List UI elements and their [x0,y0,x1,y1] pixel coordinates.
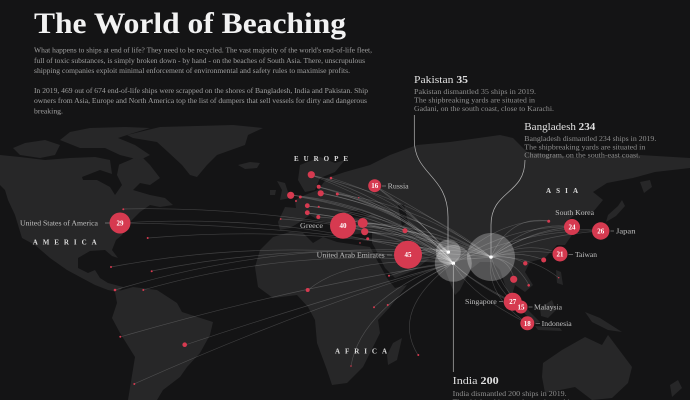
intro text [34,48,372,115]
bubble: Greece [300,213,356,239]
bubble: Taiwan [552,246,597,262]
bubble: United Arab Emirates: 45 [404,251,412,259]
bubble: Russia [368,179,409,192]
leader line: Bangladesh [491,160,525,256]
intro text: In 2019, 469 out of 674 end-of-life ships were scrapped on the shores of Bangladesh, India and Pakistan. Ship [34,88,369,95]
world map [0,125,690,400]
region labels [33,155,578,356]
bubble: United Arab Emirates [317,241,422,269]
callout: Pakistan: Pakistan dismantled 35 ships in 2019. [414,88,536,96]
bubble: Malaysia: Malaysia [534,302,563,312]
bubble: Pakistan [436,240,461,264]
callout: Bangladesh: Bangladesh dismantled 234 ships in 2019. [524,135,657,143]
bubble: United States of America: United States of America [20,218,99,228]
bubble: United States of America [20,212,130,234]
bubble: Indonesia: 18 [524,320,531,328]
bubble: Singapore: Singapore [465,297,497,306]
bubble: Russia: 16 [371,182,379,190]
bubble: Japan: Japan [616,226,636,236]
callout: Bangladesh: Bangladesh 234 [524,121,596,133]
bubble: Greece: Greece [300,221,324,230]
bubble: India [435,245,472,282]
leader line: India [452,264,454,372]
bubble: Bangladesh [467,233,515,281]
bubble: South Korea: South Korea [555,208,595,217]
region labels: ASIA [546,187,578,195]
region labels: AFRICA [335,348,387,356]
callout: India: India dismantled 200 ships in 2019. [453,390,567,398]
bubble: Malaysia: 15 [518,304,525,312]
bubble: Japan: 26 [597,228,605,236]
bubble: Malaysia [514,300,563,314]
leader line: Pakistan [414,115,448,251]
bubble: South Korea: 24 [568,224,576,232]
callout: Bangladesh [524,121,657,160]
callout: Pakistan: Pakistan 35 [414,74,469,86]
bubble: United Arab Emirates: United Arab Emirates [317,250,385,260]
intro text: shipping companies exploit minimal enforcement of environmental and safety rules to maximise profits. [34,68,350,75]
bubble: Singapore: 27 [509,298,517,306]
bubble: Taiwan: Taiwan [575,250,597,259]
intro text: breaking. [34,108,63,115]
bubble: Japan [592,222,636,240]
bubble: United States of America: 29 [116,220,124,228]
small scrap origin dots [110,171,559,385]
bubble: Indonesia: Indonesia [542,319,572,328]
callout: Pakistan: Gadani, on the south coast, close to Karachi. [414,105,554,113]
bubble: Indonesia [520,316,572,330]
bubble: Singapore [465,293,522,311]
callout: India [453,375,574,400]
bubble: Russia: Russia [388,182,409,190]
region labels: EUROPE [294,155,348,163]
title: The World of Beaching [34,7,346,40]
callout: India: India 200 [453,375,499,387]
callout: Bangladesh: Chattogram, on the south-east coast. [524,152,641,160]
bubble: Greece: 40 [340,222,347,230]
callout: Pakistan [414,74,554,113]
region labels: AMERICA [33,238,97,246]
intro text: What happens to ships at end of life? They need to be recycled. The vast majority of the world's end-of-life fleet, [34,48,372,54]
callout: Bangladesh: The shipbreaking yards are situated in [524,144,646,152]
bubble: South Korea [555,208,595,235]
shipping routes [111,175,601,384]
bubble: Taiwan: 21 [556,250,564,258]
intro text: owners from Asia, Europe and North America top the list of dumpers that sell vessels for dirty and dangerous [34,98,367,105]
callout: Pakistan: The shipbreaking yards are situated in [414,96,536,104]
intro text: full of toxic substances, is simply broken down - by hand - on the beaches of South Asia. There, unscrupulous [34,58,365,65]
